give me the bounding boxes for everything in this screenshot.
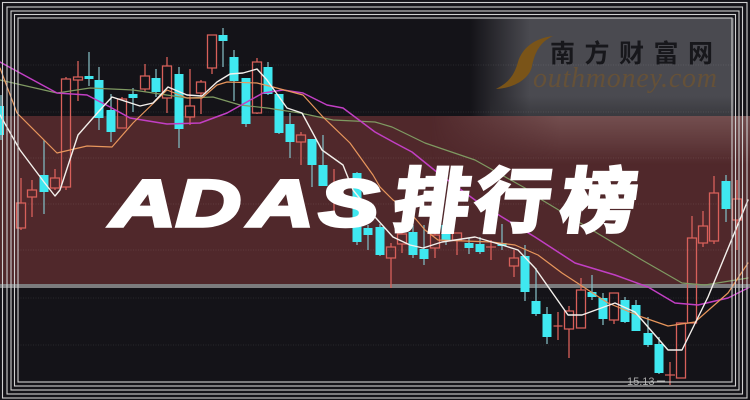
- title: A: [109, 167, 176, 240]
- watermark panel glow: [470, 18, 734, 116]
- orange MA line: [0, 68, 748, 326]
- title: D: [176, 167, 241, 240]
- title: S: [319, 167, 379, 240]
- horizontal red band: [0, 116, 750, 288]
- logo swoosh S: [496, 36, 553, 89]
- magenta MA line: [0, 62, 748, 305]
- watermark Chinese name: 南方财富网: [550, 39, 713, 68]
- low price label: 15.13: [627, 376, 655, 388]
- white MA line: [0, 69, 748, 350]
- title: 排: [389, 163, 475, 241]
- green MA line: [0, 80, 748, 285]
- title: 行: [470, 163, 556, 241]
- watermark domain: outhmoney.com: [533, 63, 717, 94]
- title: A: [247, 167, 314, 240]
- moving average lines: [0, 62, 748, 350]
- watermark logo: [496, 36, 717, 94]
- title: [109, 163, 642, 241]
- title: 榜: [556, 163, 642, 241]
